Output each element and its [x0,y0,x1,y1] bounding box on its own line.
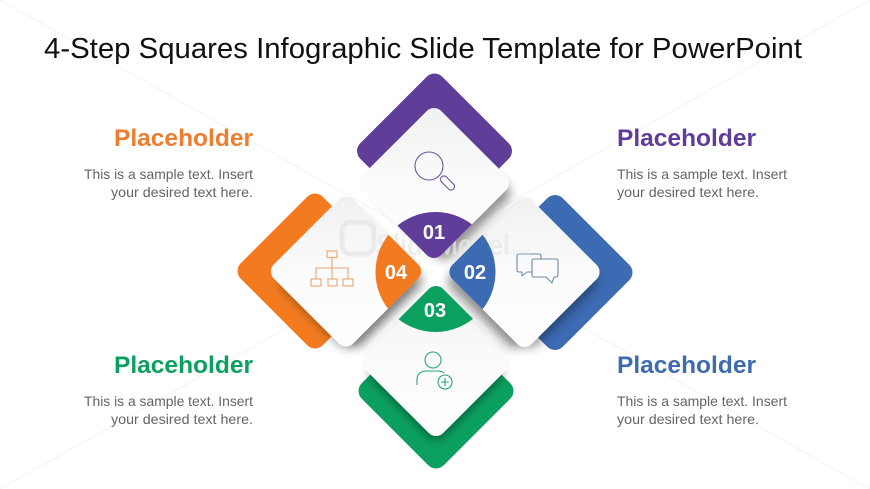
sector 02: 02 [464,262,486,284]
text block: orange placeholder: your desired text here. [111,184,253,200]
text block: green placeholder: This is a sample text. Insert [84,393,253,409]
sector 02 [449,234,496,310]
step 04 card [267,192,427,353]
watermark: .com [510,247,530,257]
watermark [342,222,530,262]
sector 03: 03 [424,300,446,322]
text block: blue placeholder: This is a sample text. Insert [617,393,787,409]
text block: green placeholder [84,352,253,427]
text block: purple placeholder: your desired text here. [617,184,759,200]
text block: orange placeholder [84,125,253,200]
text block: blue placeholder: Placeholder [617,352,756,379]
step 02 card [443,193,604,353]
text block: blue placeholder: your desired text here. [617,411,759,427]
sector 04: 04 [385,262,408,284]
text block: orange placeholder: This is a sample text. Insert [84,166,253,182]
icon: org chart [311,251,353,286]
chevron: blue [473,190,637,355]
title: 4-Step Squares Infographic Slide Template for PowerPoint [44,33,802,65]
chevron: orange [233,189,397,353]
text block: purple placeholder: This is a sample text. Insert [617,166,787,182]
step 01 card [355,104,515,264]
text block: green placeholder: Placeholder [114,352,253,379]
text block: purple placeholder: Placeholder [617,125,756,152]
chevron: purple [352,69,517,233]
sector 01: 01 [423,222,445,244]
text block: green placeholder: your desired text here. [111,411,253,427]
sector 04 [376,234,422,309]
text block: blue placeholder [617,352,787,427]
text block: orange placeholder: Placeholder [114,125,253,152]
step 03 card [357,282,515,444]
icon: person with plus [417,352,452,389]
sector 01 [398,212,472,258]
icon: magnifier [415,152,456,191]
text block: purple placeholder [617,125,787,200]
sector 03 [398,286,473,332]
chevron: green [354,309,518,473]
icon: chat bubbles [517,254,558,283]
watermark: SlideModel [376,229,510,262]
